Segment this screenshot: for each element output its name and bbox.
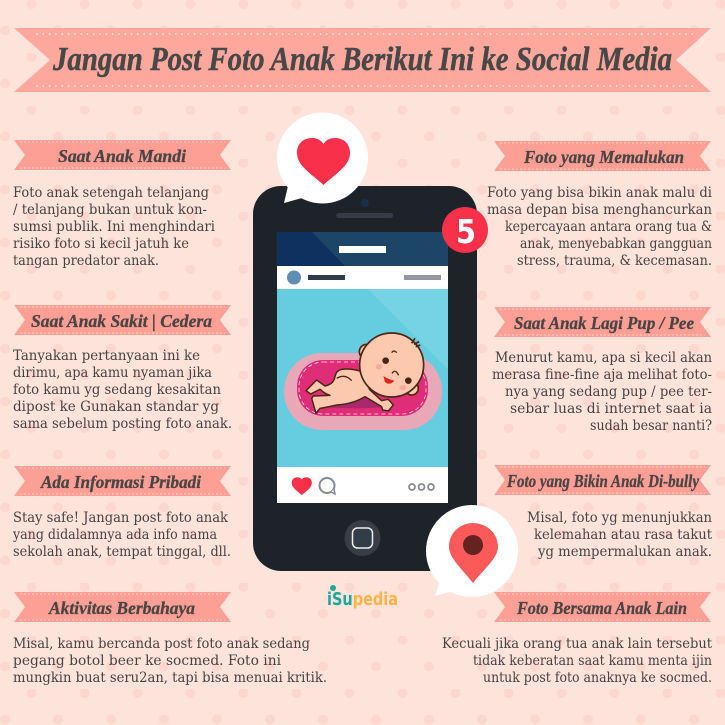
panel: Foto yang Bikin Anak Di-bully: Misal, foto yg menunjukkan — [527, 510, 712, 526]
phone mockup — [253, 186, 477, 571]
panel: Aktivitas Berbahaya: Aktivitas Berbahaya — [48, 598, 195, 618]
home button — [344, 520, 380, 556]
panel: Saat Anak Sakit / Cedera: dipost ke Gunakan standar yg — [13, 399, 219, 415]
panel: Saat Anak Lagi Pup / Pee — [492, 307, 712, 434]
panel: Aktivitas Berbahaya — [13, 592, 327, 686]
panel: Ada Informasi Pribadi — [12, 466, 231, 560]
panel: Saat Anak Sakit / Cedera — [13, 305, 232, 432]
logo: isupedia: iSupedia — [327, 589, 398, 610]
panel: Ada Informasi Pribadi: Stay safe! Jangan post foto anak — [13, 510, 228, 526]
panel: Saat Anak Lagi Pup / Pee: nya yang sedang pup / pee ter- — [505, 384, 712, 400]
panel: Aktivitas Berbahaya: pegang botol beer ke socmed. Foto ini — [13, 653, 282, 669]
panel: Saat Anak Mandi — [13, 140, 231, 269]
panel: Foto yang Memalukan: Foto yang bisa bikin anak malu di — [487, 185, 712, 201]
panel: Foto yang Memalukan: stress, trauma, & kecemasan. — [517, 253, 712, 269]
panel: Saat Anak Mandi: tangan predator anak. — [13, 253, 159, 269]
panel: Saat Anak Mandi: risiko foto si kecil jatuh ke — [13, 236, 189, 252]
panel: Saat Anak Lagi Pup / Pee: sudah besar nanti? — [590, 418, 712, 434]
panel: Saat Anak Lagi Pup / Pee: Menurut kamu, apa si kecil akan — [495, 350, 712, 366]
panel: Foto Bersama Anak Lain: Kecuali jika orang tua anak lain tersebut — [442, 636, 712, 652]
panel: Saat Anak Mandi: / telanjang bukan untuk kon- — [13, 202, 207, 218]
badge: number 5: 5 — [456, 212, 476, 251]
panel: Saat Anak Mandi: Foto anak setengah telanjang — [13, 185, 209, 201]
panel: Foto yang Bikin Anak Di-bully: yg mempermalukan anak. — [537, 544, 712, 560]
panel: Saat Anak Mandi: sumsi publik. Ini menghindari — [13, 219, 215, 235]
panel: Ada Informasi Pribadi: Ada Informasi Pribadi — [40, 472, 201, 492]
icon: location pin speech bubble — [426, 505, 518, 597]
post action bar — [277, 467, 448, 503]
panel: Saat Anak Lagi Pup / Pee: merasa fine-fine aja melihat foto- — [492, 367, 712, 383]
panel: Foto yang Bikin Anak Di-bully: kelemahan atau rasa takut — [534, 527, 712, 543]
panel: Aktivitas Berbahaya: mungkin buat seru2an, tapi bisa menuai kritik. — [13, 670, 327, 686]
panel: Saat Anak Sakit / Cedera: Tanyakan pertanyaan ini ke — [13, 348, 200, 364]
panel: Saat Anak Sakit / Cedera: sama sebelum posting foto anak. — [13, 416, 232, 432]
panel: Foto Bersama Anak Lain: Foto Bersama Anak Lain — [516, 598, 687, 618]
post author row — [277, 266, 448, 289]
app header bar — [277, 232, 448, 266]
post photo background — [277, 289, 448, 467]
panel: Saat Anak Mandi: Saat Anak Mandi — [58, 146, 186, 166]
panel: Saat Anak Sakit / Cedera: Saat Anak Sakit | Cedera — [31, 311, 212, 331]
panel: Saat Anak Sakit / Cedera: foto kamu yg sedang kesakitan — [13, 382, 221, 398]
panel: Foto yang Bikin Anak Di-bully — [494, 465, 712, 560]
title banner — [14, 28, 711, 92]
baby on mat illustration — [284, 333, 442, 430]
panel: Aktivitas Berbahaya: Misal, kamu bercanda post foto anak sedang — [13, 636, 310, 652]
panel: Saat Anak Sakit / Cedera: dirimu, apa kamu nyaman jika — [13, 365, 212, 381]
panel: Ada Informasi Pribadi: sekolah anak, tempat tinggal, dll. — [13, 544, 231, 560]
panel: Saat Anak Lagi Pup / Pee: sebar luas di internet saat ia — [510, 401, 712, 417]
icon: heart speech bubble — [277, 112, 368, 204]
panel: Saat Anak Lagi Pup / Pee: Saat Anak Lagi Pup / Pee — [514, 313, 694, 333]
panel: Foto yang Memalukan: Foto yang Memalukan — [523, 147, 684, 167]
badge: number 5 — [442, 207, 488, 253]
panel: Foto Bersama Anak Lain — [442, 592, 712, 686]
panel: Foto yang Memalukan: masa depan bisa menghancurkan — [487, 202, 712, 218]
panel: Foto yang Memalukan — [487, 141, 712, 269]
panel: Ada Informasi Pribadi: yang didalamnya ada info nama — [12, 527, 217, 543]
